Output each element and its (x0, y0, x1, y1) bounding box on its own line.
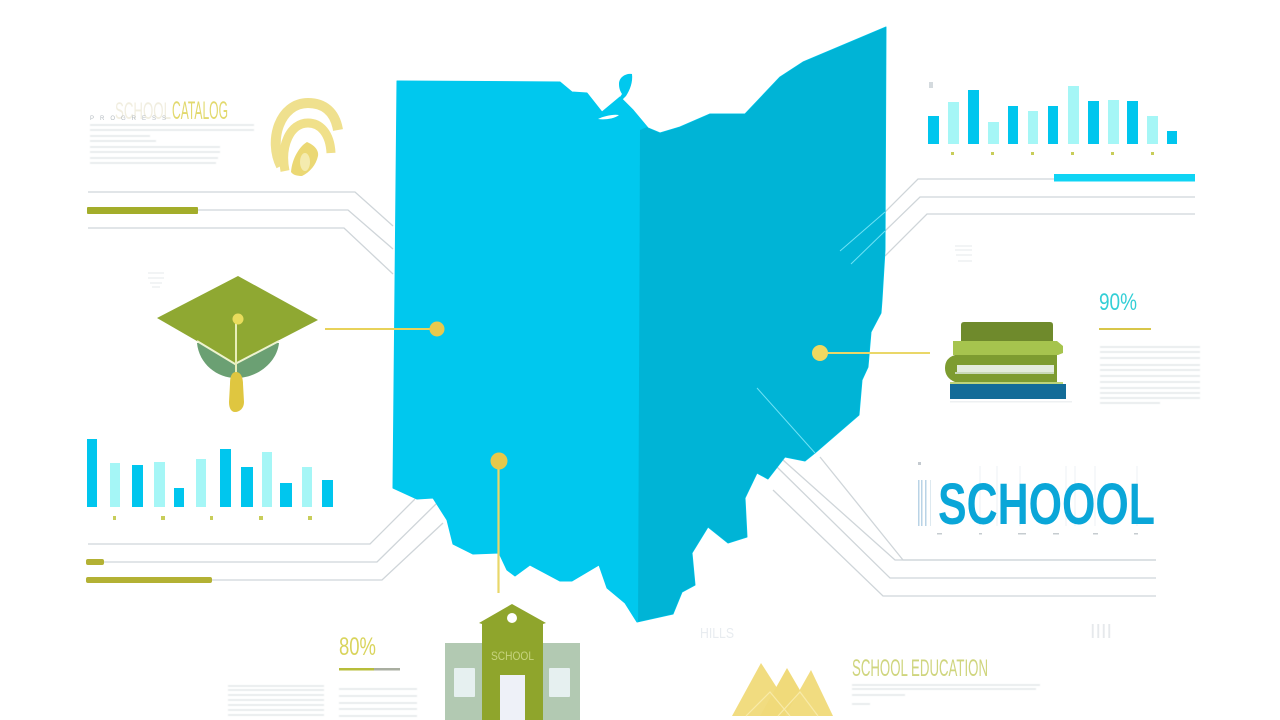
stat: 90%: 90% (1099, 289, 1137, 316)
connector lines: upper left (88, 192, 393, 274)
faint label: left of cap (148, 273, 164, 287)
tick labels (937, 533, 1138, 534)
panel: bottom right heading and text (852, 655, 1040, 704)
sign text: SCHOOL (491, 649, 534, 663)
faint label: bottom centre: HILLS (700, 625, 734, 642)
faint label: bottom right: IIII (1090, 621, 1112, 643)
olive bar: upper left (87, 207, 198, 214)
panel: top left heading and text: CATALOG (172, 97, 228, 125)
Ohio map (393, 20, 900, 630)
icon: school building (445, 604, 580, 720)
connector lines: upper right (885, 179, 1195, 256)
stat: 80%: 80% (339, 633, 376, 661)
stat underline (1099, 328, 1151, 330)
thin vertical bars (918, 462, 1137, 526)
body text lines (852, 685, 1040, 704)
faded heading part: SCHOOL (115, 98, 171, 125)
pin: books link (812, 345, 930, 361)
body text lines (90, 125, 254, 163)
heading: SCHOOL: SCHOOOL (938, 472, 1155, 537)
connector lines: lower left (88, 499, 443, 580)
faint label: upper right (955, 246, 972, 261)
icon: yellow rings (276, 103, 338, 176)
heading: bottom right: SCHOOL EDUCATION (852, 655, 988, 682)
bar chart: lower left (87, 439, 333, 520)
body text lines (1100, 347, 1200, 403)
cyan bar: upper right (1054, 174, 1195, 182)
icon: graduation cap (157, 276, 318, 412)
stat underline (339, 668, 374, 670)
pin: school link (490, 452, 508, 593)
panel: books statistic (1099, 289, 1200, 403)
pin: graduation cap link (325, 322, 444, 336)
icon: yellow mountains (732, 663, 833, 716)
olive bars: lower left (86, 559, 212, 583)
panel: top left heading and text (90, 97, 254, 163)
icon: stack of books (945, 322, 1072, 402)
heading marks: PROGRESS (90, 116, 170, 122)
panel: SCHOOL wordmark (918, 462, 1155, 537)
connector lines: lower right (773, 457, 1156, 596)
body text lines (228, 686, 417, 716)
bar chart: top right (928, 82, 1177, 155)
panel: 80% statistic (228, 633, 417, 716)
